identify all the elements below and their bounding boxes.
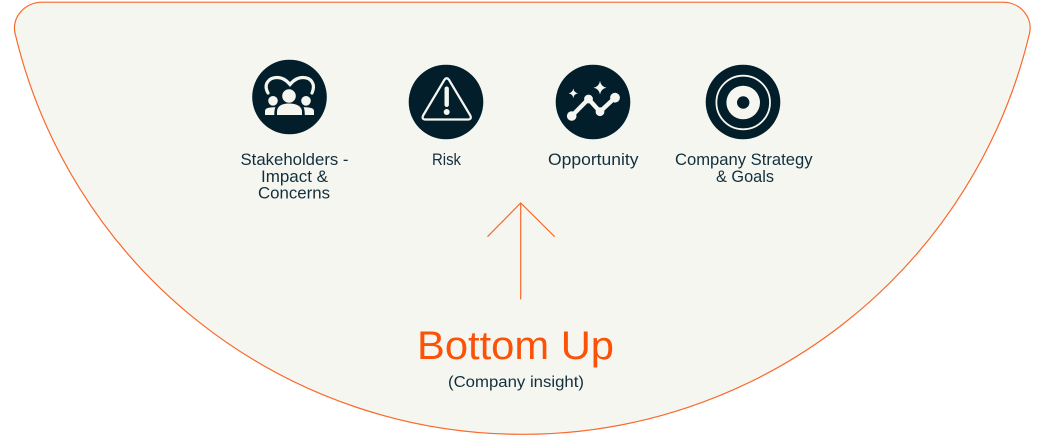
label: opportunity: Opportunity [548,151,639,169]
subheading: company insight: (Company insight) [448,374,584,391]
label: stakeholders [240,151,348,202]
icon: risk warning triangle [409,65,483,139]
label: stakeholders: Concerns [258,184,330,202]
label: stakeholders: Impact & [261,168,328,186]
label: company strategy and goals [675,151,813,186]
label: company strategy and goals: Company Strategy [675,151,813,169]
arrow: pointing up [488,203,555,300]
icon: stakeholders [252,60,327,134]
label: risk: Risk [432,151,462,169]
label: company strategy and goals: & Goals [716,168,774,186]
label: stakeholders: Stakeholders - [240,151,348,169]
heading: bottom up: Bottom Up [417,324,614,368]
icon: strategy target [706,65,780,139]
icon: opportunity chart with stars [556,65,630,139]
